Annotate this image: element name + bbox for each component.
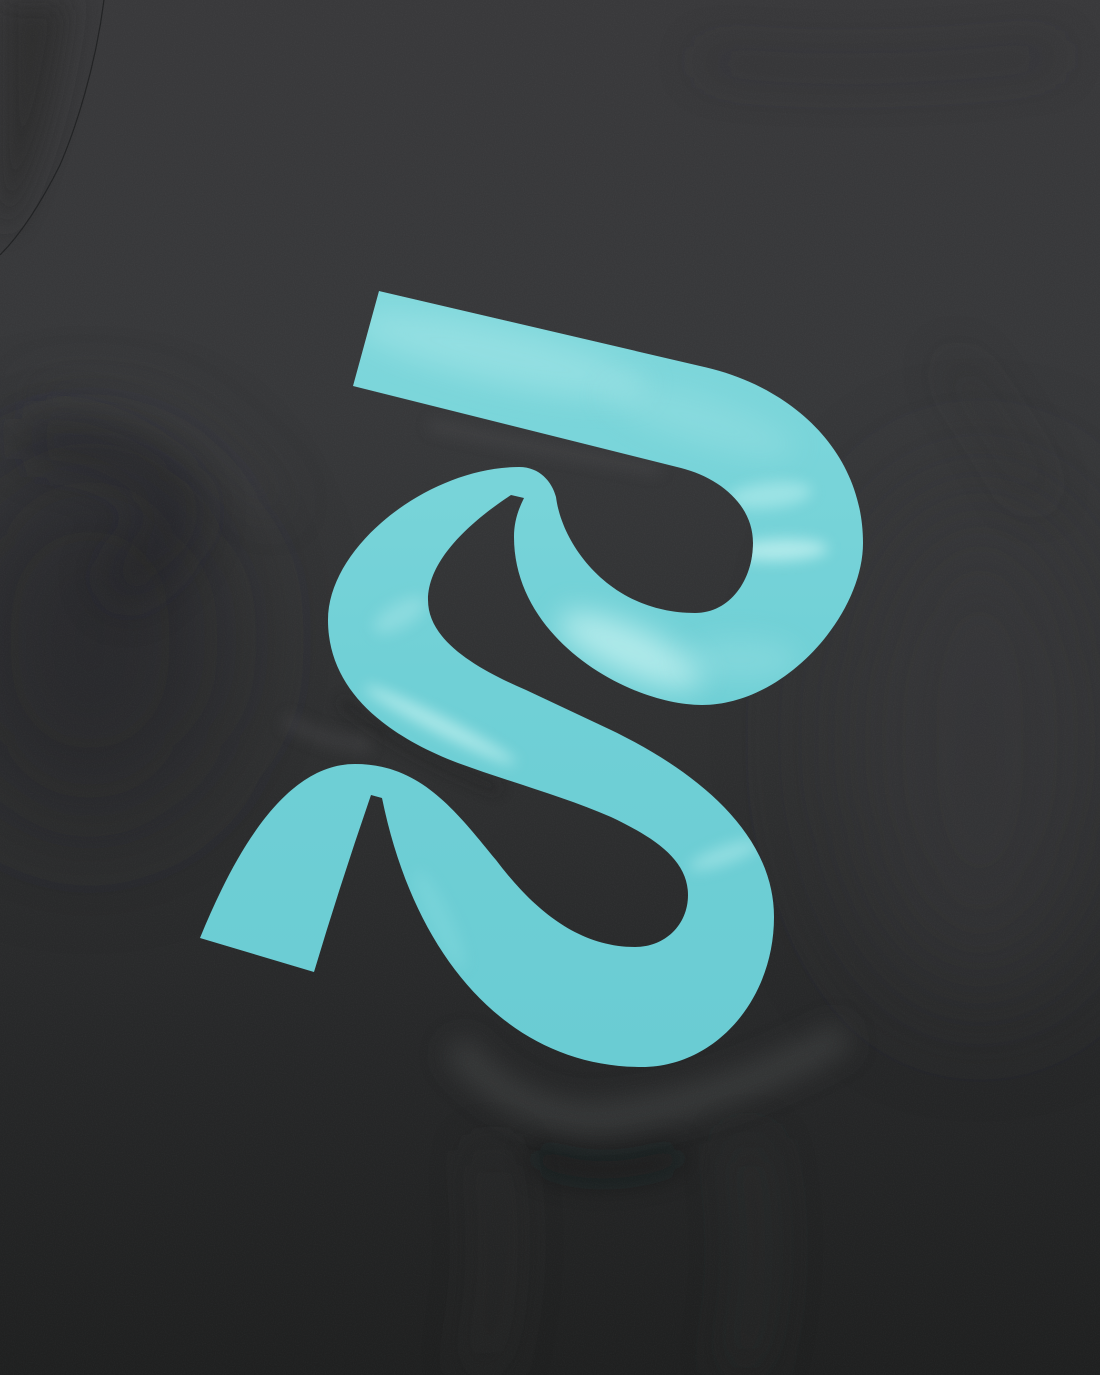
left side dark area (0, 450, 240, 830)
crease beside bowl (950, 360, 1040, 500)
right side light area (840, 480, 1100, 1000)
logo: teal S-shaped mark (200, 291, 863, 1067)
crease between bars (430, 425, 660, 470)
diagonal ridge above the flag (285, 720, 370, 745)
upper fold (700, 55, 1060, 69)
bottom V fold shadow (535, 1155, 680, 1170)
lower vertical folds (480, 1150, 498, 1375)
bottom V fold highlight (455, 1035, 845, 1118)
inner diagonal shadow (340, 700, 500, 790)
sleeve seam (0, 0, 104, 255)
sleeve shadow (0, 0, 70, 230)
left fold shadow (25, 439, 178, 590)
left ridge highlight (30, 394, 280, 510)
